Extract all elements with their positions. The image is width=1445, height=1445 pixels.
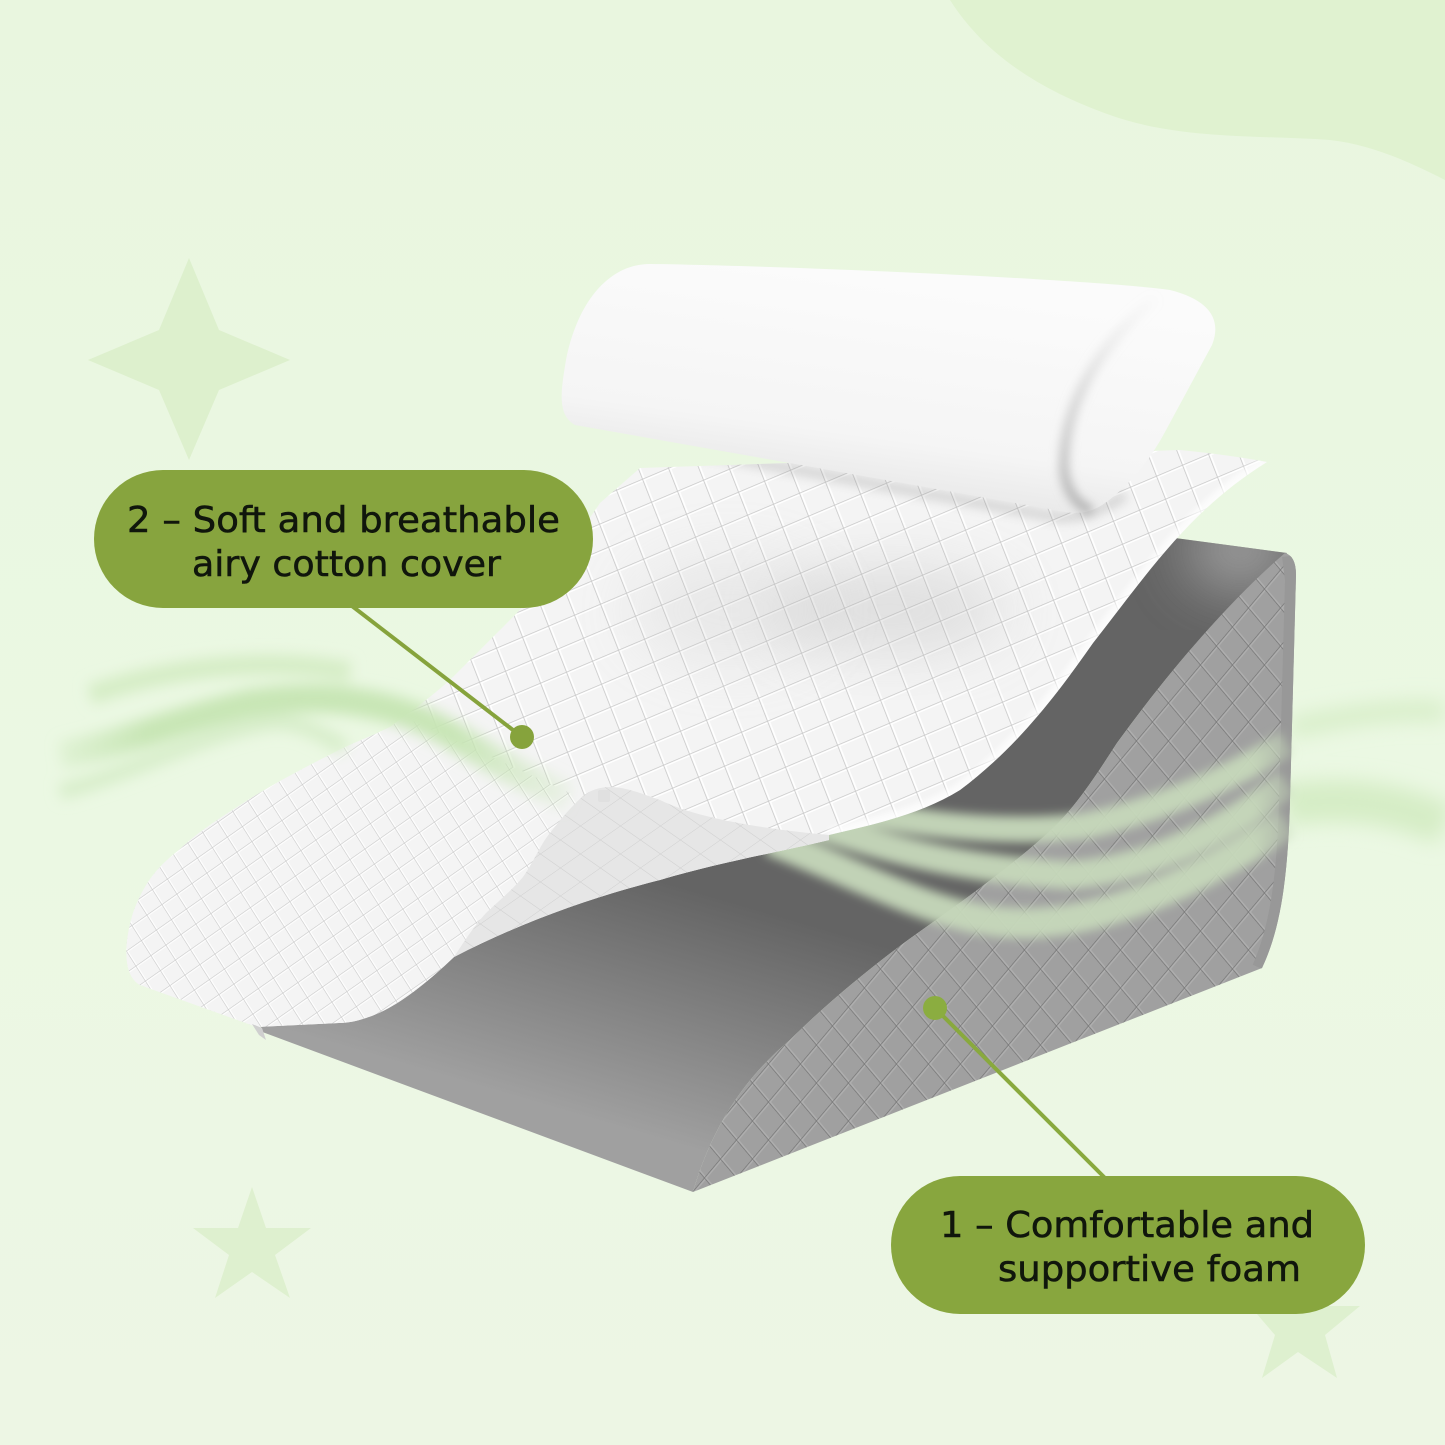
label: airy cotton cover <box>192 544 501 585</box>
five-point star bottom left <box>193 1187 311 1298</box>
cover soft shading <box>652 460 1258 835</box>
label: 2 – Soft and breathable <box>127 500 560 541</box>
label: 1 – Comfortable and <box>940 1205 1314 1246</box>
label <box>127 500 560 585</box>
leader dot <box>923 996 947 1020</box>
background air wisps right <box>1285 711 1445 825</box>
leader dot <box>510 725 534 749</box>
pill <box>94 470 593 608</box>
foam sloped top surface <box>257 538 1287 1192</box>
pill <box>891 1176 1365 1314</box>
five-point star bottom right <box>1250 1306 1360 1378</box>
foam quilted side face <box>693 553 1296 1192</box>
bolster body <box>562 264 1215 513</box>
cover front lobe <box>126 721 578 1027</box>
leader line <box>352 606 522 737</box>
cover folded underside <box>454 787 829 957</box>
top-right green blob <box>950 0 1445 180</box>
leader line <box>935 1008 1105 1178</box>
white quilted cover <box>100 430 1267 1060</box>
four-point sparkle <box>88 258 290 460</box>
grey foam wedge <box>257 510 1296 1192</box>
zipper notch <box>252 1024 266 1040</box>
half-round white bolster pillow <box>562 264 1215 513</box>
foam top highlight <box>1185 510 1295 590</box>
callout 2: cover <box>94 470 593 749</box>
label: supportive foam <box>998 1249 1301 1290</box>
left air wisps <box>60 665 569 797</box>
air flow wisps over foam <box>770 743 1287 923</box>
cover seam at fold <box>598 790 610 802</box>
label <box>940 1205 1314 1290</box>
bolster end cap crease <box>1064 298 1155 511</box>
cover upper surface <box>126 450 1267 1027</box>
foam side rim <box>1260 556 1293 968</box>
callout 1: foam <box>891 996 1365 1314</box>
